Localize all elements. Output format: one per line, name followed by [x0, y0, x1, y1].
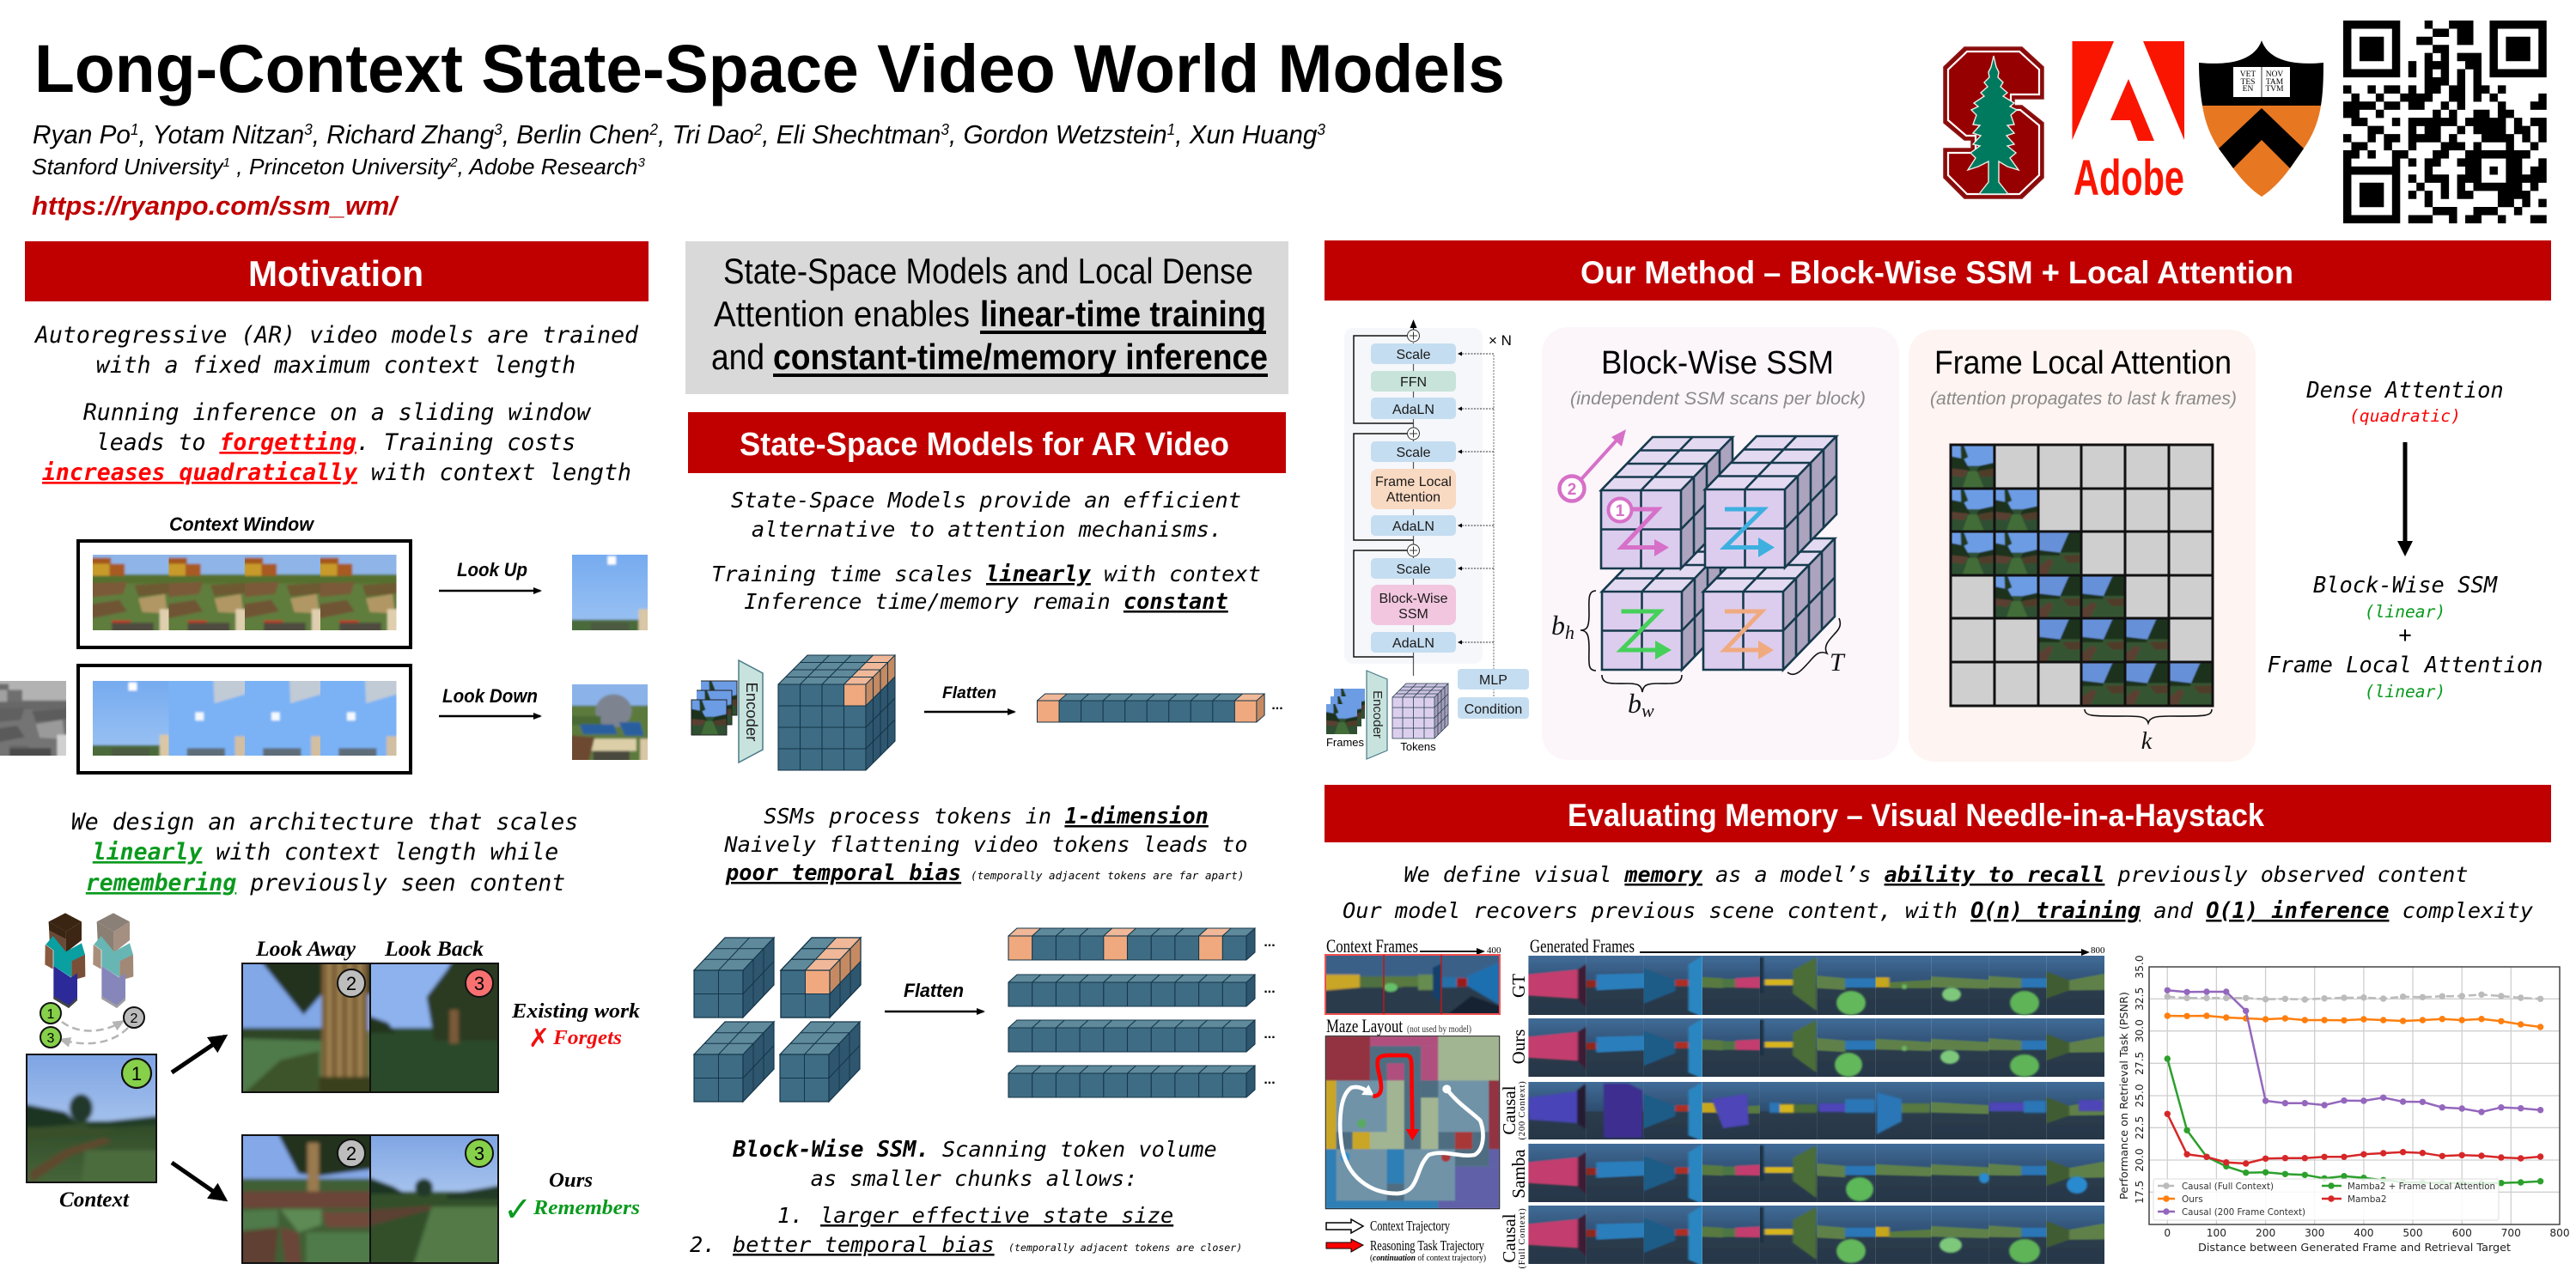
row labels: Causal: [1499, 1085, 1519, 1135]
legend: chart series: Ours: [2182, 1194, 2203, 1205]
text block: ssm scaling: Training time scales linearly with context: [711, 562, 1261, 586]
text block: block-wise ssm benefits: better temporal bias: [733, 1232, 995, 1257]
diagram: frames encoder tokens: [1320, 671, 1448, 759]
diagram: context window: Context Window: [169, 513, 315, 535]
image row: ours: [216, 1109, 524, 1288]
row labels: (Full Context): [1518, 1207, 1527, 1269]
logo: Princeton: EN: [2243, 85, 2253, 94]
diagram: block-wise flatten: Flatten: [904, 980, 964, 1001]
text block: block-wise ssm benefits: Block-Wise SSM. Scanning token volume: [732, 1137, 1217, 1162]
text block: block-wise ssm benefits: larger effective state size: [820, 1203, 1173, 1228]
authors: , Gordon Wetzstein: [949, 119, 1167, 149]
affiliations: , Princeton University: [230, 154, 452, 179]
callout: key takeaway: constant-time/memory inference: [773, 337, 1268, 377]
diagram: architecture stack: AdaLN: [1392, 519, 1434, 534]
callout: key takeaway: [685, 241, 1288, 394]
map: maze layout: [1325, 1015, 1500, 1209]
axis labels: 20.0: [2134, 1148, 2146, 1172]
callout: key takeaway: linear-time training: [980, 294, 1266, 334]
axis labels: 400: [2354, 1227, 2374, 1239]
diagram: architecture stack: SSM: [1398, 607, 1428, 622]
label: ours remembers: ✓: [503, 1190, 533, 1230]
diagram: architecture stack: [1344, 321, 1529, 719]
callout: key takeaway: and: [711, 337, 764, 377]
label: block dimensions: h: [1565, 622, 1574, 643]
map: maze layout: (not used by model): [1407, 1023, 1471, 1035]
label: k frames brace: [2085, 709, 2212, 755]
heading: evaluating memory: [1325, 785, 2551, 842]
panel: motivation: [0, 241, 663, 1288]
text block: our design: remembering previously seen content: [86, 870, 565, 896]
panel: block-wise SSM: Block-Wise SSM: [1601, 345, 1834, 381]
icon: four token rows: ...: [1264, 1027, 1276, 1042]
diagram: architecture stack: Scale: [1396, 562, 1431, 577]
affiliations: 3: [638, 155, 646, 170]
label: ours remembers: Remembers: [533, 1197, 640, 1219]
affiliations: 1: [223, 155, 230, 170]
logo: Princeton: TVM: [2265, 85, 2284, 94]
row labels: Ours: [1508, 1030, 1529, 1064]
image: context frames: [1320, 935, 1505, 1019]
panel: state-space models for AR video: [685, 412, 1286, 1257]
text block: context limitation: Autoregressive (AR) video models are trained: [33, 322, 639, 349]
heading: state-space models: State-Space Models for AR Video: [740, 427, 1229, 463]
axis labels: 800: [2549, 1227, 2570, 1239]
icon: four token rows: [1008, 928, 1276, 1097]
line chart: retrieval task performance: [2118, 955, 2570, 1254]
icon: four token blocks: [694, 938, 861, 1102]
text block: temporal bias: SSMs process tokens in 1-dimension: [764, 804, 1209, 829]
authors: 3: [1317, 121, 1325, 138]
text block: ssm scaling: alternative to attention mechanisms.: [752, 517, 1222, 542]
legend: chart series: Mamba2: [2348, 1194, 2387, 1205]
text block: context limitation: Running inference on a sliding window: [83, 399, 592, 426]
authors: 1: [131, 121, 139, 138]
axis labels: Performance on Retrieval Task (PSNR): [2118, 992, 2130, 1200]
text block: ssm scaling: [711, 488, 1261, 614]
image grid: generated frames: [1499, 935, 2115, 1270]
diagram: architecture stack: Attention: [1386, 490, 1440, 505]
authors: , Berlin Chen: [502, 119, 649, 149]
diagram: architecture stack: × N: [1489, 332, 1512, 349]
arrow: to ours: [172, 1163, 225, 1200]
diagram: look away and back path: 1: [47, 1007, 55, 1022]
text block: temporal bias: Naively flattening video tokens leads to: [723, 832, 1248, 857]
icon: player characters: [45, 913, 133, 1008]
diagram: architecture stack: Block-Wise: [1379, 592, 1448, 606]
row: GT: [1519, 950, 2115, 1021]
icon: four token rows: ...: [1264, 935, 1276, 950]
image row: existing work: Look Back: [384, 938, 484, 961]
icon: token cube: [778, 655, 895, 770]
label: block dimensions: b: [1628, 688, 1641, 719]
text block: ssm scaling: State-Space Models provide an efficient: [731, 488, 1241, 513]
label: ours remembers: Ours: [549, 1170, 593, 1192]
diagram: context window: Look Up: [457, 559, 527, 580]
text block: temporal bias: [723, 804, 1248, 885]
text block: complexity comparison: +: [2398, 622, 2412, 647]
label: k frames brace: k: [2141, 728, 2153, 755]
diagram: architecture stack: Condition: [1465, 702, 1522, 717]
text block: memory definition: [1343, 862, 2534, 923]
label: existing work forgets: Existing work: [511, 1000, 640, 1023]
heading: motivation: Motivation: [248, 253, 423, 294]
logo: Princeton: TAM: [2266, 78, 2284, 87]
text block: context limitation: leads to forgetting. Training costs: [96, 429, 575, 456]
legend: trajectories: (continuation of context trajectory): [1370, 1253, 1486, 1263]
diagram: architecture stack: Scale: [1396, 348, 1431, 362]
axis labels: [2118, 955, 2570, 1254]
logo: Princeton: TES: [2241, 78, 2255, 87]
diagram: architecture stack: AdaLN: [1392, 403, 1434, 417]
label: block dimensions: b: [1551, 610, 1565, 641]
diagram: look away and back path: [40, 1003, 144, 1048]
legend: chart series: Causal (Full Context): [2182, 1182, 2274, 1192]
axis labels: 27.5: [2134, 1052, 2146, 1075]
image row: existing work: [216, 938, 524, 1118]
diagram: architecture stack: Frame Local: [1375, 475, 1452, 489]
axis labels: 32.5: [2134, 987, 2146, 1011]
callout: key takeaway: Attention enables: [714, 294, 970, 334]
heading: our method: [1325, 240, 2551, 301]
label: block dimensions: w: [1641, 700, 1654, 721]
authors: , Eli Shechtman: [762, 119, 941, 149]
text block: complexity comparison: (linear): [2365, 602, 2445, 622]
image grid: generated frames: 800: [2091, 945, 2105, 956]
axis labels: 30.0: [2134, 1019, 2146, 1042]
axis labels: 22.5: [2134, 1116, 2146, 1139]
diagram: encoder to flattened tokens: Flatten: [942, 684, 996, 702]
image: context frames: 400: [1487, 945, 1501, 956]
row labels: Samba: [1508, 1149, 1529, 1199]
authors: , Xun Huang: [1175, 119, 1317, 149]
image: context frames: Context Frames: [1326, 935, 1418, 957]
chart: attention frame grid: [1942, 436, 2221, 714]
panel: block-wise SSM: (independent SSM scans per block): [1570, 389, 1866, 409]
affiliations: 2: [449, 155, 458, 170]
icon: token blocks with scan paths: 1: [1616, 502, 1625, 520]
icon: token blocks with scan paths: [1560, 429, 1836, 670]
text block: block-wise ssm benefits: as smaller chunks allows:: [811, 1166, 1137, 1191]
logo: Princeton: NOV: [2266, 70, 2283, 79]
text block: complexity comparison: Frame Local Attention: [2267, 652, 2543, 677]
diagram: architecture stack: MLP: [1479, 673, 1507, 688]
icon: encoder: Encoder: [743, 683, 761, 741]
text block: context limitation: with a fixed maximum context length: [96, 352, 575, 379]
text block: ssm scaling: Inference time/memory remain constant: [744, 589, 1228, 614]
text block: block-wise ssm benefits: 2.: [690, 1232, 716, 1257]
diagram: look away and back path: 3: [47, 1031, 55, 1046]
QR code: [2343, 25, 2547, 219]
axis labels: 25.0: [2134, 1084, 2146, 1108]
axis labels: 100: [2207, 1227, 2226, 1239]
text block: context limitation: increases quadratically with context length: [42, 459, 631, 486]
authors: , Tri Dao: [658, 119, 754, 149]
image row: ours: 3: [474, 1143, 484, 1164]
icon: token blocks with scan paths: 2: [1568, 481, 1576, 499]
legend: trajectories: Context Trajectory: [1370, 1218, 1450, 1234]
row: Causal full context: [1519, 1200, 2115, 1270]
text block: our design: We design an architecture that scales: [71, 809, 578, 835]
heading: state-space models: [688, 412, 1286, 473]
row: Causal 200 context: [1519, 1076, 2115, 1145]
diagram: frames encoder tokens: Frames: [1326, 736, 1365, 749]
axis labels: 300: [2305, 1227, 2324, 1239]
panel: evaluating memory: [1320, 785, 2570, 1270]
legend: trajectories: [1326, 1218, 1486, 1263]
text block: block-wise ssm benefits: [690, 1137, 1242, 1257]
panel: block-wise SSM: [1542, 327, 1899, 760]
logo: Adobe: [2072, 41, 2184, 206]
authors: 3: [494, 121, 502, 138]
diagram: architecture stack: AdaLN: [1392, 636, 1434, 651]
diagram: context window: [0, 513, 663, 775]
legend: chart series: Mamba2 + Frame Local Attention: [2348, 1182, 2495, 1192]
text block: our design: linearly with context length while: [93, 839, 558, 866]
diagram: frames encoder tokens: Tokens: [1400, 740, 1436, 753]
diagram: encoder to flattened tokens: ...: [1271, 698, 1283, 713]
title: Long-Context State-Space Video World Models: [34, 30, 1505, 106]
map: maze layout: Maze Layout: [1326, 1015, 1403, 1036]
diagram: block-wise flatten: [694, 928, 1276, 1102]
icon: input frames: [685, 674, 744, 742]
label: existing work forgets: Forgets: [552, 1027, 622, 1049]
icon: encoder: [739, 660, 763, 762]
label: block dimensions: T: [1830, 648, 1846, 677]
logo: Princeton: VET: [2240, 70, 2256, 79]
text block: context limitation: [33, 322, 639, 486]
icon: flattened token row: [1038, 694, 1264, 722]
affiliations: Stanford University: [32, 154, 221, 179]
text block: complexity comparison: [2267, 377, 2543, 702]
heading: evaluating memory: Evaluating Memory – Visual Needle-in-a-Haystack: [1568, 798, 2264, 833]
panel: frame local attention: [1909, 330, 2256, 762]
text block: block-wise ssm benefits: (temporally adjacent tokens are closer): [1008, 1242, 1242, 1254]
logo: Stanford: [1944, 47, 2043, 198]
text block: complexity comparison: (linear): [2365, 682, 2445, 702]
authors: 2: [753, 121, 762, 138]
label: existing work forgets: [511, 1000, 640, 1054]
row labels: GT: [1508, 974, 1529, 998]
text block: temporal bias: poor temporal bias: [725, 860, 961, 885]
axis labels: 17.5: [2134, 1181, 2146, 1204]
diagram: architecture stack: FFN: [1400, 375, 1427, 390]
icon: four token rows: ...: [1264, 1072, 1276, 1087]
diagram: architecture stack: Scale: [1396, 446, 1431, 460]
text block: memory definition: We define visual memory as a model’s ability to recall previously observed content: [1404, 862, 2468, 887]
label: block dimensions: [1551, 591, 1846, 721]
row labels: (200 Context): [1518, 1080, 1527, 1140]
authors: 2: [649, 121, 658, 138]
text block: our design: [71, 809, 578, 896]
legend: chart series: [2153, 1179, 2499, 1220]
legend: trajectories: Reasoning Task Trajectory: [1370, 1237, 1484, 1254]
row: Ours: [1519, 1012, 2115, 1083]
text block: complexity comparison: Block-Wise SSM: [2313, 572, 2499, 598]
heading: our method: Our Method – Block-Wise SSM + Local Attention: [1580, 255, 2293, 290]
text block: complexity comparison: (quadratic): [2349, 406, 2461, 426]
authors: 3: [304, 121, 313, 138]
arrow: to existing work: [172, 1036, 225, 1072]
axis labels: Distance between Generated Frame and Retrieval Target: [2198, 1242, 2511, 1254]
row labels: [1499, 974, 1529, 1269]
legend: chart series: Causal (200 Frame Context): [2182, 1207, 2305, 1218]
label: existing work forgets: ✗: [528, 1024, 550, 1054]
authors: 1: [1167, 121, 1175, 138]
logo: Adobe: Adobe: [2074, 150, 2184, 206]
row labels: Causal: [1499, 1213, 1519, 1263]
axis labels: 200: [2256, 1227, 2275, 1239]
image row: existing work: Look Away: [255, 938, 356, 961]
authors: , Yotam Nitzan: [139, 119, 304, 149]
panel: frame local attention: (attention propagates to last k frames): [1930, 389, 2237, 409]
axis labels: 35.0: [2134, 955, 2146, 979]
diagram: frames encoder tokens: Encoder: [1370, 690, 1385, 738]
text block: complexity comparison: Dense Attention: [2305, 377, 2504, 403]
axis labels: 600: [2452, 1227, 2472, 1239]
authors: Ryan Po: [33, 119, 135, 149]
axis labels: 700: [2501, 1227, 2521, 1239]
image: context frame: 1: [131, 1063, 142, 1084]
row: Samba: [1519, 1138, 2115, 1208]
affiliations: , Adobe Research: [458, 154, 638, 179]
heading: motivation: [25, 241, 649, 301]
text block: block-wise ssm benefits: 1.: [777, 1203, 803, 1228]
diagram: context window: Look Down: [442, 685, 538, 707]
text block: temporal bias: (temporally adjacent tokens are far apart): [971, 869, 1244, 882]
callout: key takeaway: State-Space Models and Local Dense: [723, 251, 1253, 291]
panel: frame local attention: Frame Local Attention: [1934, 345, 2232, 381]
image: context frame: Context: [59, 1188, 130, 1212]
diagram: look away and back path: 2: [131, 1012, 138, 1026]
diagram: encoder to flattened tokens: [685, 655, 1283, 770]
image grid: generated frames: Generated Frames: [1530, 935, 1635, 957]
axis labels: 500: [2402, 1227, 2423, 1239]
panel: our method: [1320, 240, 2551, 762]
logo: Princeton: [2199, 40, 2323, 197]
authors: , Richard Zhang: [313, 119, 494, 149]
text block: memory definition: Our model recovers previous scene content, with O(n) training and O(1) inference complexity: [1343, 898, 2534, 923]
project link: https://ryanpo.com/ssm_wm/: [32, 191, 399, 221]
axis labels: 0: [2164, 1227, 2171, 1239]
icon: four token rows: ...: [1264, 981, 1276, 996]
image: context frame: [1, 1029, 182, 1212]
image row: existing work: 3: [474, 973, 484, 994]
authors: 3: [941, 121, 949, 138]
label: ours remembers: [503, 1170, 640, 1230]
image row: ours: 2: [346, 1143, 356, 1164]
image row: existing work: 2: [346, 973, 356, 994]
